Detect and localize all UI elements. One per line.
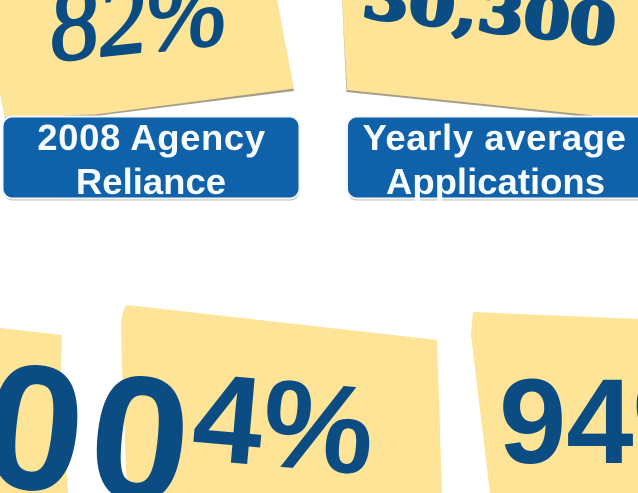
- label: 2008 Agency Reliance: Reliance: [76, 161, 226, 202]
- panel: 82% sticky note: [0, 0, 294, 118]
- label: 2008 Agency Reliance: [2, 116, 300, 202]
- panel: 4% sticky note: [121, 305, 442, 493]
- label: Yearly average Applications: Yearly average: [362, 117, 627, 158]
- panel: 30,300 sticky note: [342, 0, 638, 122]
- label: Yearly average Applications: [347, 116, 638, 202]
- panel: partially visible left sticky note: [0, 328, 68, 493]
- label: Yearly average Applications: Applications: [386, 161, 605, 202]
- label: 2008 Agency Reliance: 2008 Agency: [37, 117, 266, 158]
- panel: 94% sticky note: [471, 312, 638, 493]
